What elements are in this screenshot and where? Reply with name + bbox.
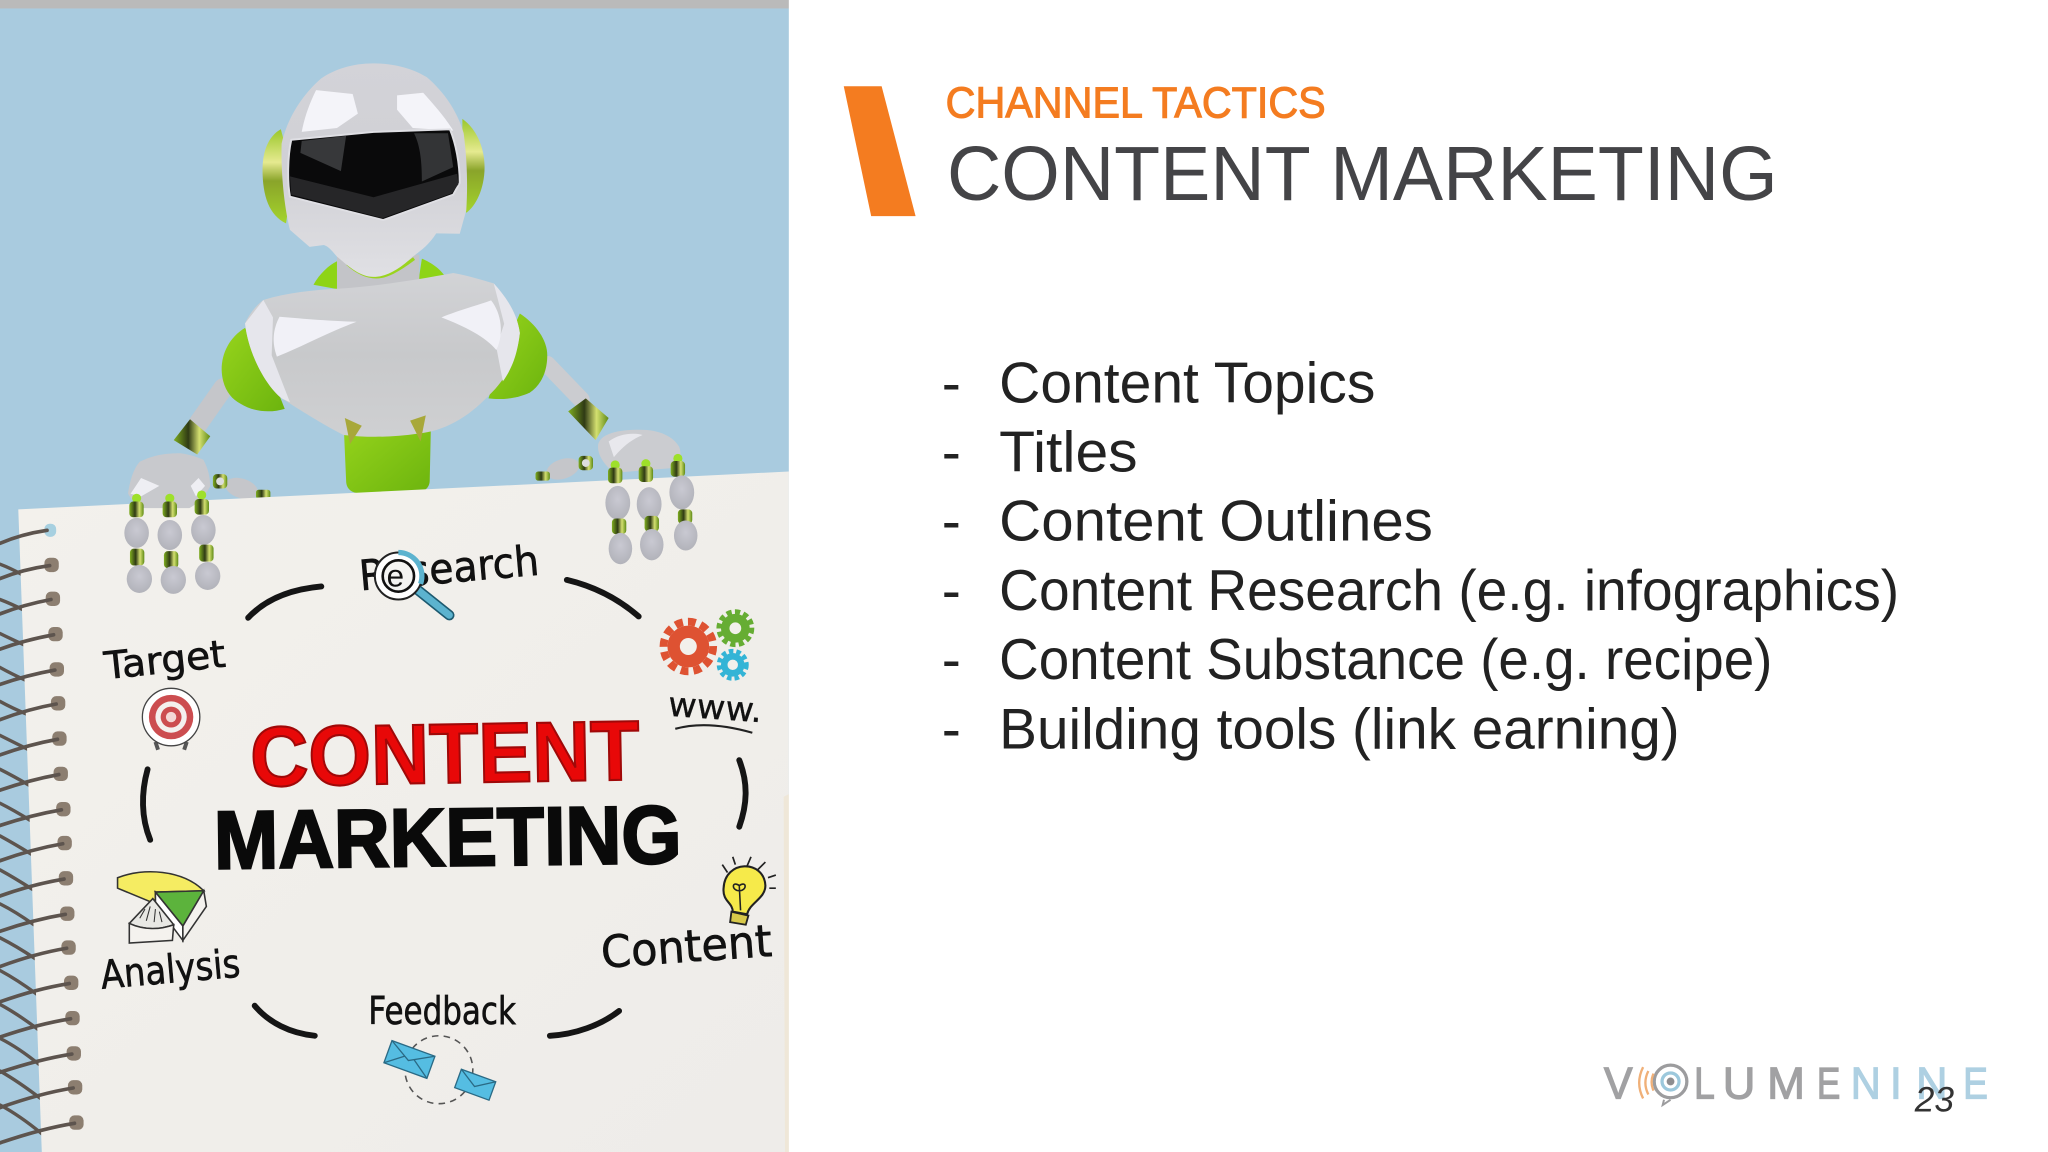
logo letters: nine: E <box>1963 1059 1988 1108</box>
robot belly <box>344 421 431 494</box>
logo mark: sound ring <box>1639 1065 1687 1105</box>
logo: volumenine <box>1604 1059 1988 1108</box>
robot torso <box>245 273 520 444</box>
robot arms <box>174 364 609 455</box>
panel: slide content background <box>789 0 2048 1152</box>
bullet: content topics: - <box>942 351 961 415</box>
red gear <box>664 622 713 671</box>
logo letters: lume: M <box>1767 1059 1805 1108</box>
logo letters: nine: N <box>1851 1059 1881 1108</box>
robot far fingers <box>213 454 593 503</box>
right hand fingers <box>605 454 697 564</box>
bullet: content research: Content Research (e.g. infographics) <box>999 559 1899 623</box>
label: target with bullseye: Target <box>101 632 228 688</box>
green gear <box>719 612 752 645</box>
bullet: titles <box>942 421 1138 485</box>
bullet: building tools: Building tools (link earning) <box>999 697 1680 761</box>
logo letters: nine: N <box>1916 1059 1947 1108</box>
logo letters: nine: I <box>1890 1059 1902 1108</box>
robot hand: left, gripping notebook <box>124 453 220 594</box>
heading word: content: CONTENT <box>249 703 640 804</box>
slide number: 23 <box>1914 1081 1954 1120</box>
blue gear <box>719 651 746 679</box>
logo letters: nine <box>1851 1059 1988 1108</box>
icon: orange title slash <box>844 86 916 216</box>
bullet: content research: - <box>942 559 961 623</box>
notebook heading: content marketing <box>213 703 682 887</box>
bullet: content topics: Content Topics <box>999 351 1375 415</box>
label: research with magnifier: Research <box>357 536 541 600</box>
bullet: content substance: - <box>942 628 961 692</box>
icon: magnifier: e <box>387 558 404 593</box>
robot shoulders <box>222 313 547 411</box>
icon: gears <box>664 612 752 679</box>
icon: light bulb <box>722 857 776 925</box>
logo letters: lume <box>1694 1059 1840 1108</box>
cycle arcs <box>143 580 746 1036</box>
panel: illustration background <box>0 8 789 1152</box>
label: target with bullseye <box>101 632 228 750</box>
bullet: titles: - <box>942 421 961 485</box>
label: feedback with envelopes: Feedback <box>368 989 516 1033</box>
title: content marketing: CONTENT MARKETING <box>947 131 1778 217</box>
left hand fingers <box>124 490 220 594</box>
notebook page <box>18 472 789 1152</box>
logo letters: lume: L <box>1694 1059 1715 1108</box>
bullet: content outlines: - <box>942 490 961 554</box>
robot ears <box>263 119 485 223</box>
logo letter: V: V <box>1604 1059 1633 1108</box>
icon: magnifier <box>375 552 449 615</box>
bullet: content substance: Content Substance (e.g. recipe) <box>999 628 1772 692</box>
icon: exchanged envelopes <box>384 1036 496 1104</box>
robot hand: right, gripping notebook <box>598 430 697 564</box>
notebook binding holes and front wire <box>0 524 84 1143</box>
icon: target <box>142 688 200 750</box>
label: feedback with envelopes <box>368 989 516 1104</box>
label: analysis: Analysis <box>99 942 242 999</box>
label: content: Content <box>599 916 774 979</box>
robot head <box>281 63 467 277</box>
robot neck <box>313 255 448 291</box>
bullet: titles: Titles <box>999 421 1138 485</box>
notebook binding rings (back wire) <box>0 564 42 1134</box>
bullet: content outlines: Content Outlines <box>999 490 1433 554</box>
top grey bar <box>0 0 789 8</box>
heading word: marketing: MARKETING <box>213 790 682 887</box>
eyebrow: channel tactics: CHANNEL TACTICS <box>946 80 1326 128</box>
logo letters: lume: E <box>1817 1059 1840 1108</box>
label: www: www. <box>667 685 763 731</box>
robot visor <box>288 129 460 220</box>
logo letters: lume: U <box>1723 1059 1755 1108</box>
bullet: building tools: - <box>942 697 961 761</box>
icon: 3D pie chart <box>118 872 206 943</box>
bullet list <box>942 351 1899 761</box>
illustration: robot body behind notebook <box>174 63 609 503</box>
